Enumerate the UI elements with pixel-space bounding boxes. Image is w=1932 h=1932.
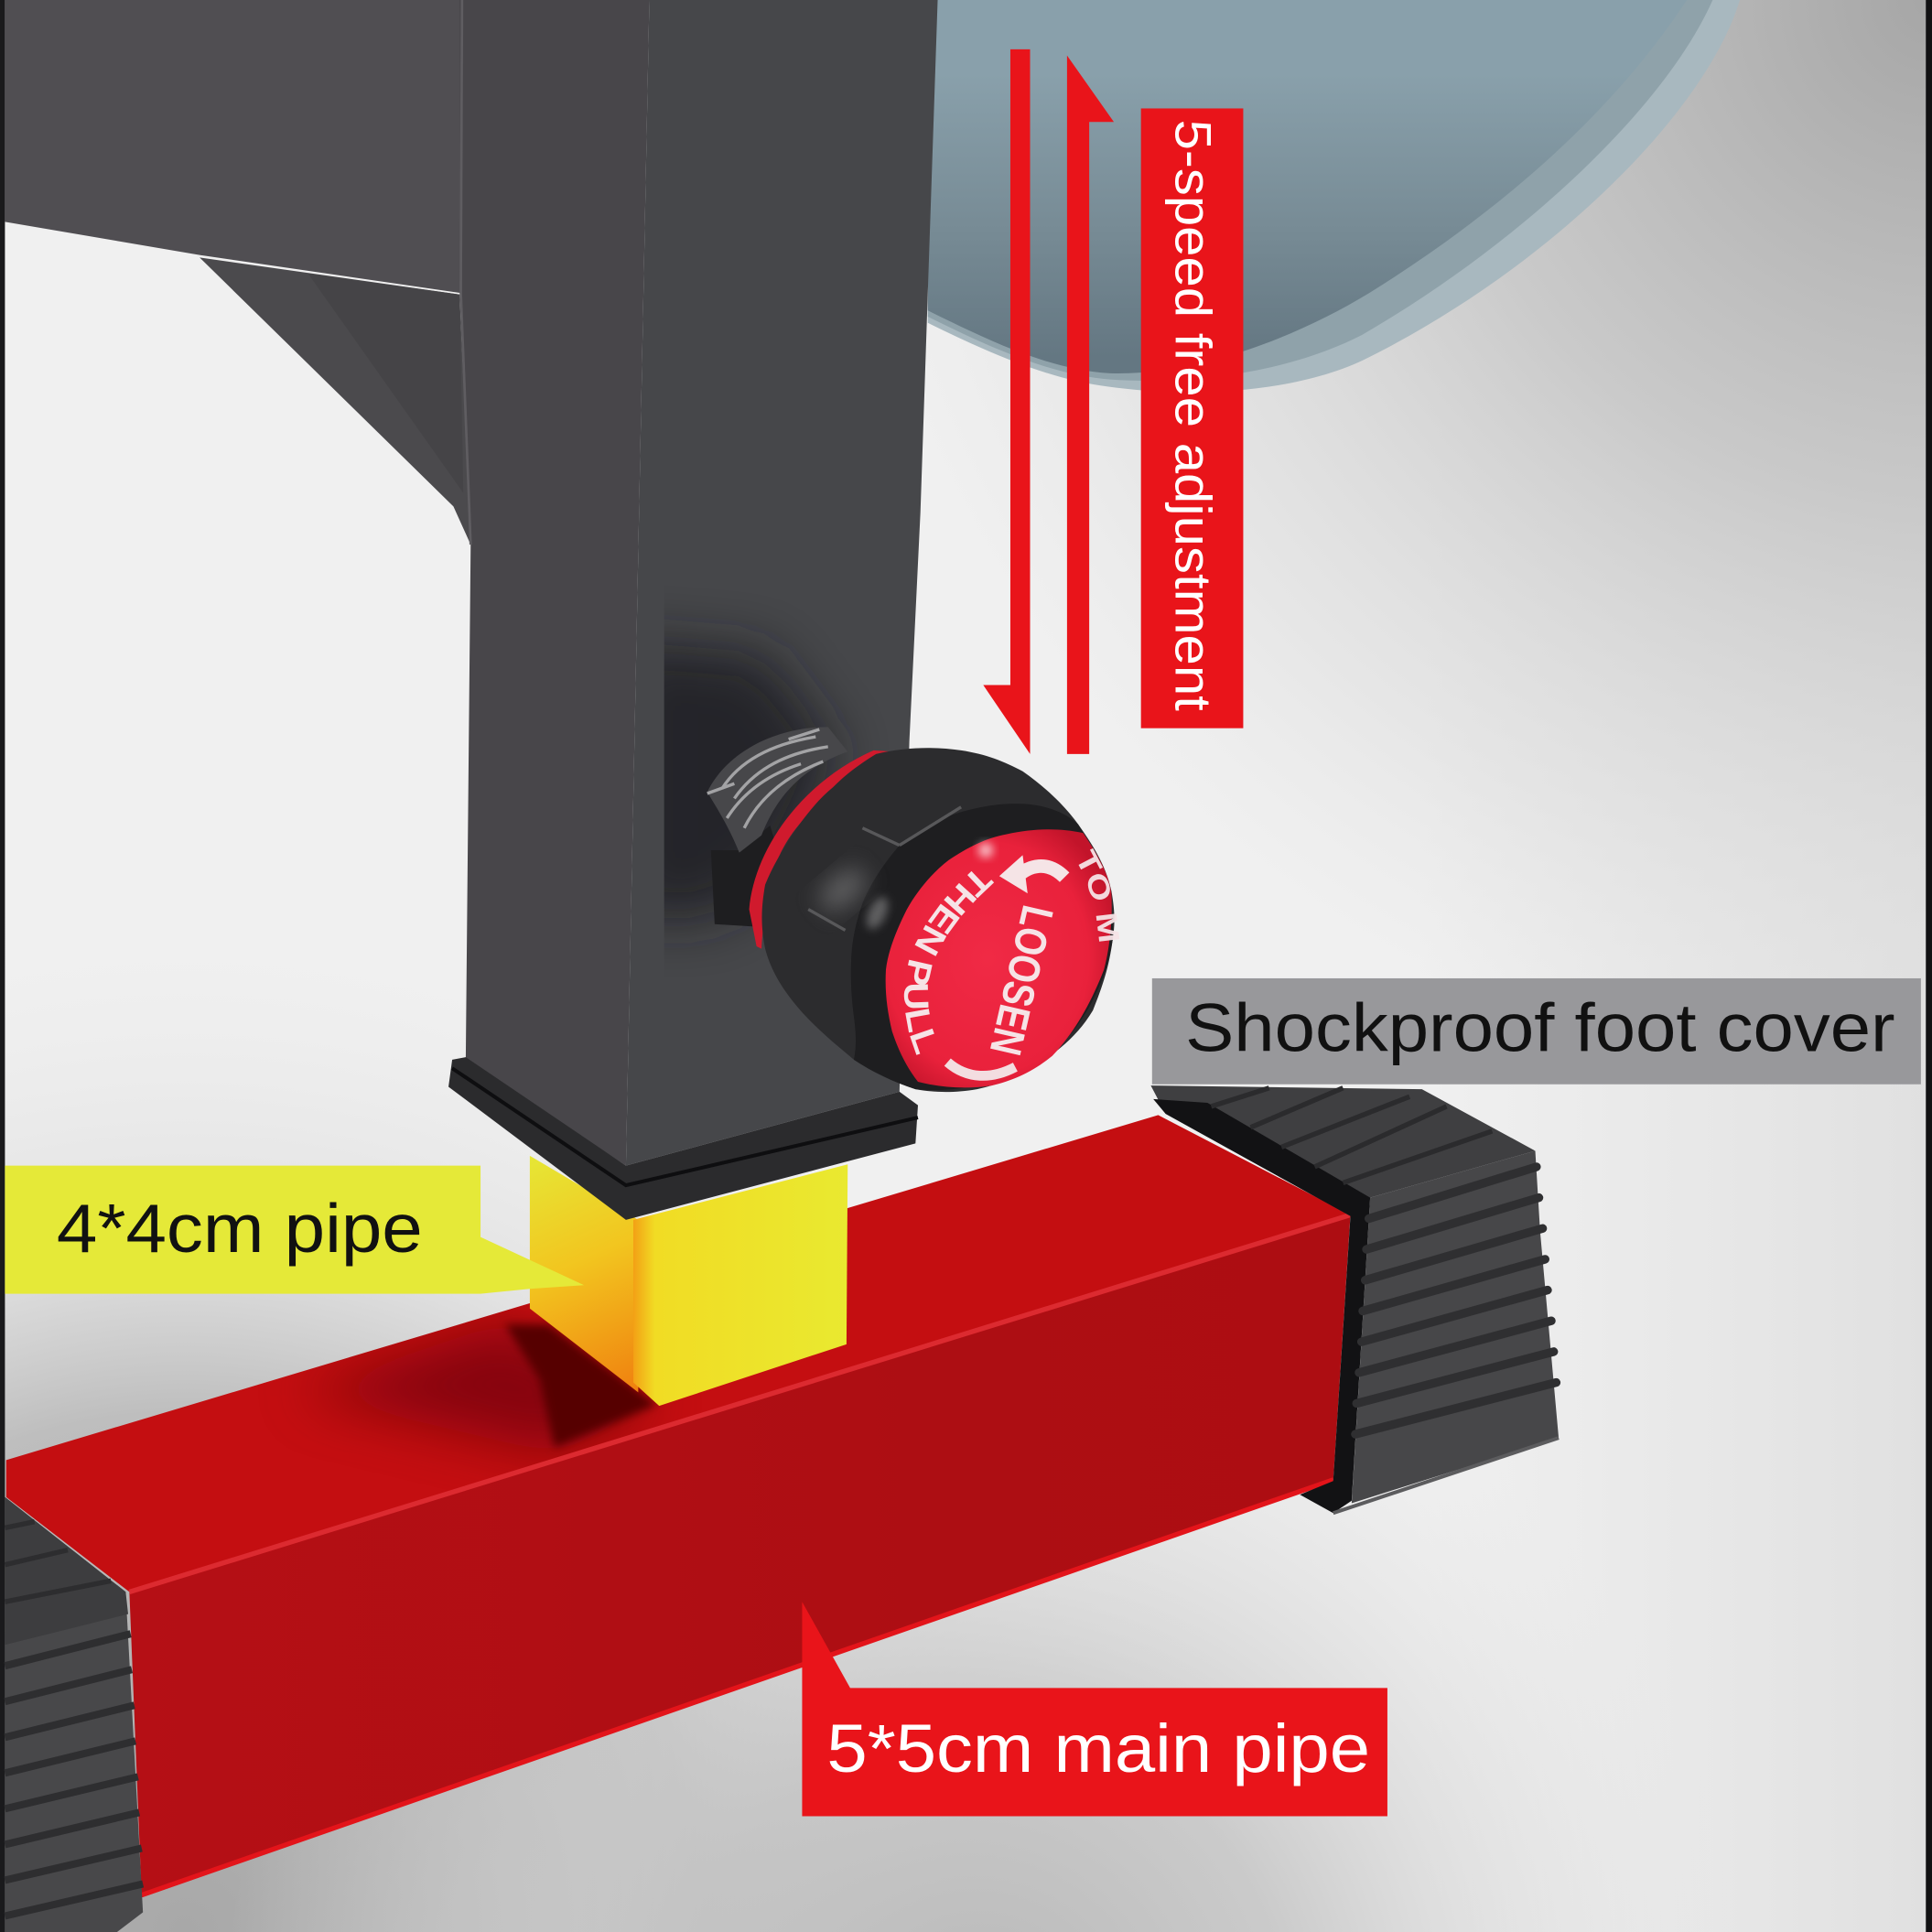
label: 5-speed free adjustment: 5-speed free adjustment [1164,120,1221,711]
knob highlights [813,861,873,918]
knob text: TO M [1078,847,1119,942]
knob body [762,748,1115,1092]
label: 4x4cm pipe [5,1166,584,1294]
square column [459,0,938,1166]
red up and down arrows [983,49,1114,754]
label: 5-speed free adjustment [1141,108,1243,729]
top ribs [1211,1088,1492,1182]
label: shockproof foot cover [1152,978,1921,1085]
knob text [904,847,1119,1060]
label: shockproof foot cover: Shockproof foot cover [1185,989,1895,1065]
threaded bolt [707,727,847,926]
knob arrows [947,843,1064,1075]
column collar [448,1057,918,1220]
tube shadow on pipe [296,1321,659,1454]
label: 4x4cm pipe: 4*4cm pipe [57,1190,423,1267]
yellow 4x4cm inner pipe [530,1156,847,1406]
label: 5x5cm main pipe [802,1602,1387,1816]
cap rim [851,804,1113,1090]
corner brace [200,257,470,545]
knob text: THEN PULL [904,871,994,1055]
knob text: LOOSEN [980,901,1063,1060]
black gasket [1153,1099,1370,1513]
front ribs [1355,1167,1556,1434]
shadow around bolt [616,641,837,918]
blue-gray weight disc [928,0,1740,392]
red knob face [886,829,1112,1087]
bench frame top [5,0,470,545]
label: 5x5cm main pipe: 5*5cm main pipe [826,1711,1370,1786]
right shockproof foot cover [1150,1085,1559,1513]
left foot cover [5,1497,143,1932]
red ring [750,750,893,949]
red main pipe [6,1115,1351,1897]
locking knob [707,727,1119,1093]
